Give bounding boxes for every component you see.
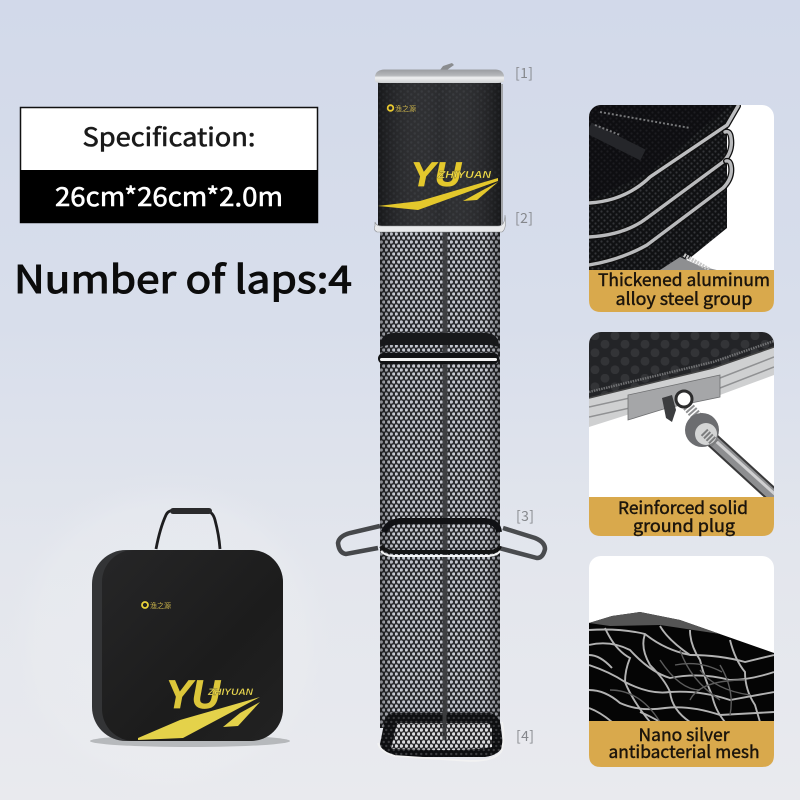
mesh strands [589,626,774,722]
lid YU logo: ZHIYUAN [437,170,492,181]
threaded rod [708,435,774,497]
carrying bag [90,508,290,747]
marker 3: [3] [516,506,534,526]
panel: reinforced plug [589,332,778,537]
centre pole [442,228,448,728]
specification heading: Specification: [82,118,256,154]
dimensions value: 26cm*26cm*2.0m [55,177,283,214]
lid YU logo [378,156,498,210]
net mesh body [380,228,500,728]
gold caption band: Thickened aluminum [598,266,770,291]
marker 4: [4] [516,726,534,746]
panel: antibacterial mesh [589,556,774,767]
silver collar ring [374,215,506,232]
black mesh shape [589,612,774,722]
clamp bracket [628,375,720,420]
panel: thickened aluminum [589,105,774,312]
silver frame rail [589,347,774,427]
aluminum rings [589,106,738,265]
gold caption band: antibacterial mesh [608,738,760,763]
product: collapsible keep net [338,63,545,761]
lid small brand mark: 渔之源 [395,104,416,114]
bag handle [156,510,220,549]
gold caption band: ground plug [633,512,735,537]
dark mesh tray [589,105,740,272]
bag small brand mark: 渔之源 [150,601,171,611]
marker 1: [1] [515,63,533,83]
right handle [499,528,545,558]
ring 3 with handles [338,521,545,558]
bag body [92,550,283,741]
marker 2: [2] [515,208,533,228]
ring 4 base [378,700,504,761]
gold caption band [589,721,774,767]
gold caption band: Nano silver [638,721,730,746]
plug hardware [660,257,716,270]
bag shadow [90,735,290,747]
gold caption band [589,494,774,537]
specification box [20,108,318,223]
number of laps heading: Number of laps:4 [14,249,352,304]
gold caption band: alloy steel group [616,285,752,310]
lid YU logo: YU [411,156,463,194]
ring 2 [378,333,499,364]
gold caption band [589,266,774,312]
bag YU logo: YU [166,673,221,717]
bag YU logo: ZHIYUAN [207,687,254,697]
bag YU logo [138,673,260,740]
callout numbers [515,63,534,746]
left handle [338,526,380,554]
honeycomb fabric [589,332,774,398]
knurled nut [685,413,719,447]
gold caption band: Reinforced solid [618,494,748,519]
top storage lid [374,63,506,232]
